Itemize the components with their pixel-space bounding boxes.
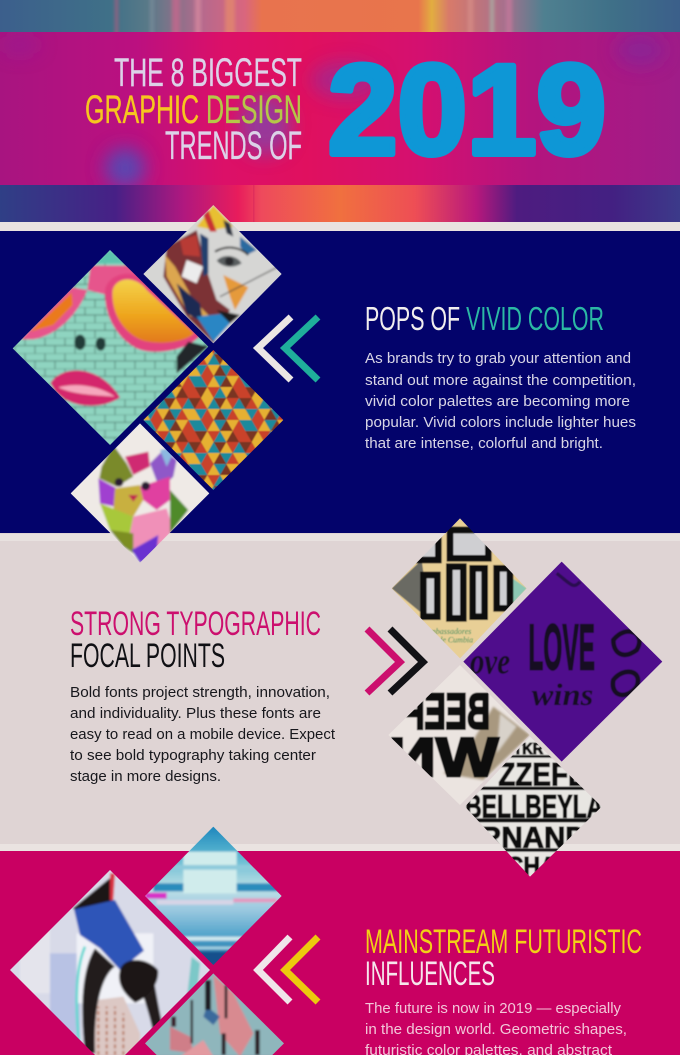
- image: flipped bold letters: BEEF: [405, 683, 490, 739]
- heading: mainstream futuristic influences: INFLUENCES: [365, 955, 495, 993]
- image: handstand figure with glitch effect: [7, 867, 213, 1055]
- image: stacked black letters: BELLBEYLA: [465, 787, 603, 824]
- image: graffiti face with sunglasses: [10, 247, 210, 447]
- chevrons: pink and black: [367, 629, 423, 693]
- image: flipped bold letters: [387, 663, 533, 807]
- image: marquee letters poster: mbassadores: [430, 627, 471, 636]
- background glows in banner: [0, 34, 664, 188]
- body text: vivid color: vivid color palettes are becoming more: [365, 394, 630, 410]
- body text: vivid color: [365, 351, 636, 452]
- image: love wins lettering: [462, 560, 665, 763]
- image: pink and teal building: [143, 972, 287, 1055]
- background: section 2 light: [0, 533, 680, 852]
- panel: pops of vivid color: [10, 203, 636, 565]
- body text: typographic: Bold fonts project strength, innovation,: [70, 685, 330, 701]
- panel: strong typographic focal points: [70, 517, 665, 881]
- body text: futuristic: in the design world. Geometric shapes,: [365, 1022, 627, 1038]
- image: glitch blue lines: [143, 825, 283, 967]
- image: colorful triangle pattern: [140, 347, 287, 493]
- image: love wins lettering: wins: [532, 678, 593, 712]
- heading: strong typographic focal points: [70, 605, 321, 675]
- image: stacked black letters: CHA: [507, 851, 557, 881]
- body text: typographic: stage in more designs.: [70, 769, 221, 785]
- image: marquee letters poster: [390, 517, 530, 660]
- heading: mainstream futuristic influences: [365, 923, 642, 993]
- collage: typography images: [387, 517, 665, 881]
- body text: futuristic: The future is now in 2019 — especially: [365, 1001, 622, 1017]
- image: marquee letters poster: de Cumbia: [438, 636, 473, 645]
- panel: mainstream futuristic influences: [7, 825, 642, 1055]
- chevrons: white and yellow: [258, 937, 318, 1002]
- title text: GRAPHIC DESIGN: [85, 88, 302, 132]
- heading: pops of vivid color: POPS OF VIVID COLOR: [365, 300, 604, 337]
- image: pop art cat: [68, 422, 212, 565]
- chevrons: white and teal: [258, 317, 318, 380]
- heading: strong typographic focal points: STRONG TYPOGRAPHIC: [70, 605, 321, 643]
- body text: futuristic: [365, 1001, 627, 1055]
- image: stacked black letters: TKR: [513, 741, 544, 758]
- title text: TRENDS OF: [165, 124, 302, 168]
- image: stacked black letters: RNAND: [480, 821, 587, 854]
- image: stacked black letters: ZZEFL: [498, 757, 585, 793]
- body text: typographic: and individuality. Plus these fonts are: [70, 706, 321, 722]
- body text: typographic: [70, 685, 335, 785]
- image: street art portrait: [140, 203, 287, 347]
- background: section 3 magenta: [0, 851, 680, 1055]
- title text: [85, 51, 302, 168]
- collage: futuristic images: [7, 825, 287, 1055]
- body text: vivid color: As brands try to grab your attention and: [365, 351, 631, 367]
- body text: vivid color: popular. Vivid colors include lighter hues: [365, 415, 636, 431]
- background: section 1 navy: [0, 222, 680, 533]
- big year 2019: 2019: [328, 39, 606, 182]
- body text: typographic: easy to read on a mobile device. Expect: [70, 727, 335, 743]
- body text: vivid color: stand out more against the competition,: [365, 373, 636, 389]
- image: flipped bold letters: WN: [388, 726, 498, 788]
- collage: vivid color images: [10, 203, 287, 565]
- body text: vivid color: that are intense, colorful and bright.: [365, 436, 603, 452]
- title text: THE 8 BIGGEST: [114, 51, 302, 95]
- header banner: [0, 0, 680, 222]
- image: love wins lettering: ove: [470, 640, 510, 681]
- body text: typographic: to see bold typography taking center: [70, 748, 316, 764]
- heading: strong typographic focal points: FOCAL POINTS: [70, 637, 225, 675]
- image: stacked black letters: [463, 735, 603, 881]
